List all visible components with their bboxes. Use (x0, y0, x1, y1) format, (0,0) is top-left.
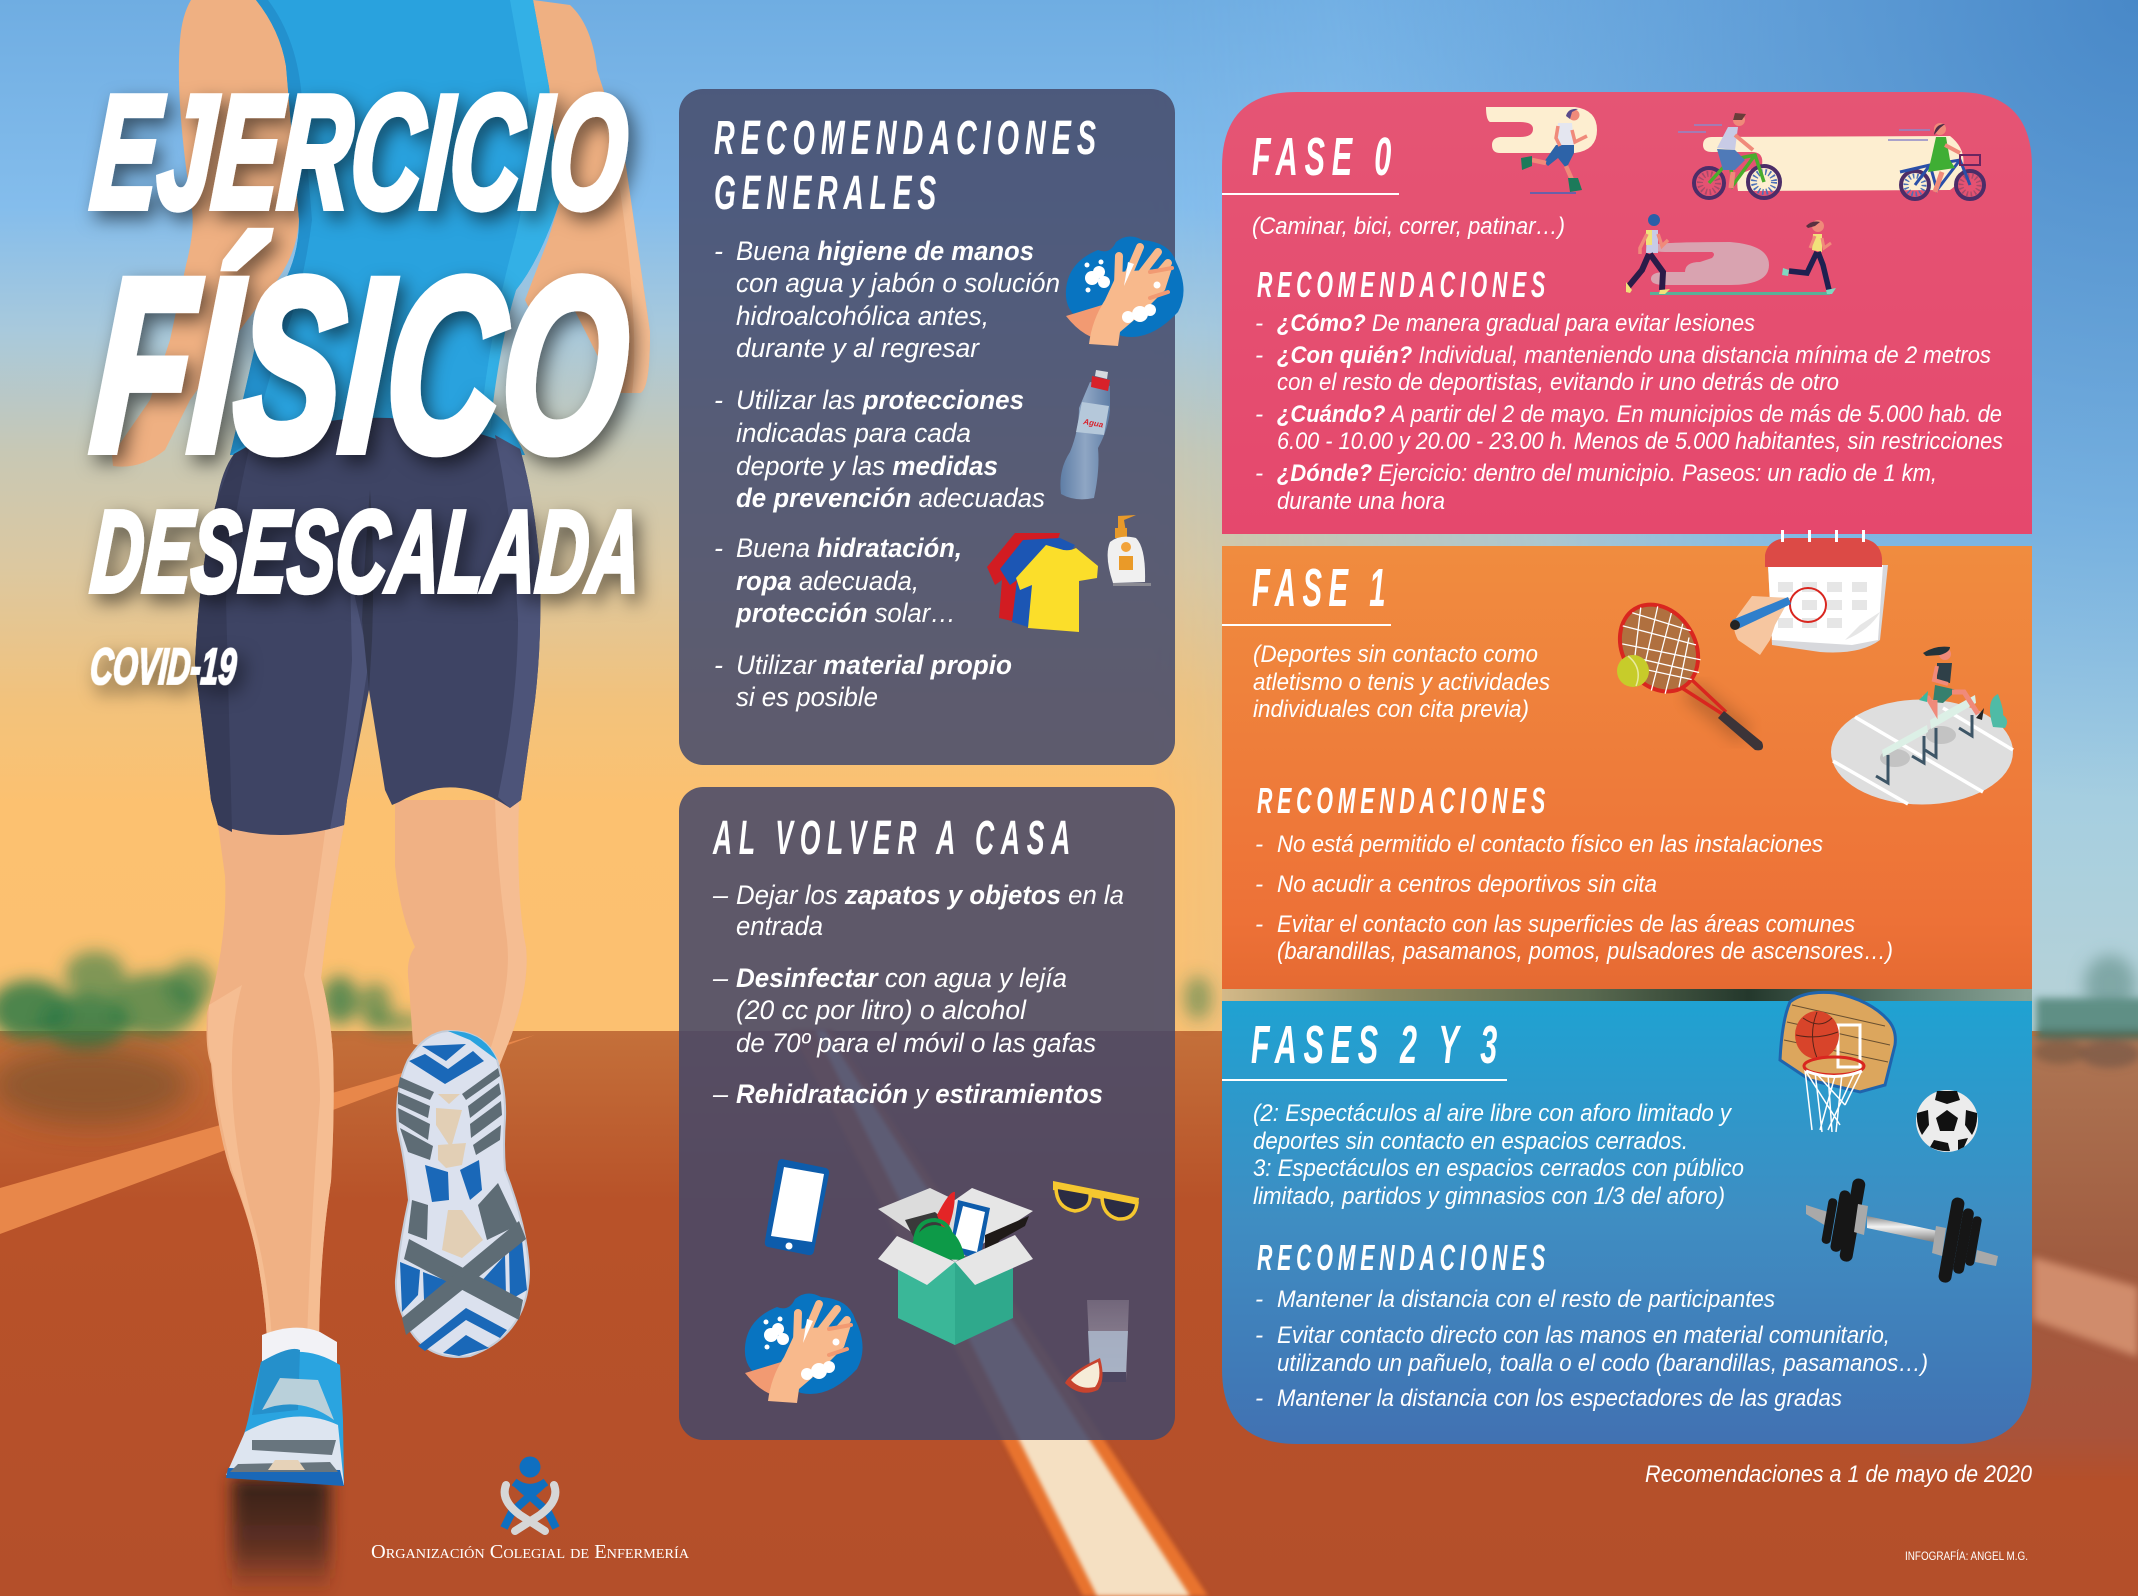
list: returning home: de 70º para el móvil o las gafas (736, 1028, 1096, 1058)
heading: recomendaciones generales: RECOMENDACIONES (714, 112, 1102, 165)
panel: fases 2 y 3 (1222, 992, 2032, 1444)
tank top (230, 0, 560, 455)
list: general recommendations: si es posible (736, 682, 878, 712)
list: phase 0: ¿Cómo? De manera gradual para evitar lesiones (1277, 310, 1755, 337)
subtitle: activities: (Caminar, bici, correr, patinar…) (1252, 213, 1565, 240)
description: phase 1: (Deportes sin contacto como (1253, 641, 1538, 668)
list: general recommendations: de prevención adecuadas (736, 483, 1045, 513)
list: general recommendations: Buena higiene de manos (736, 236, 1034, 266)
list: general recommendations: Utilizar las protecciones (736, 385, 1024, 415)
icon: basketball hoop (1780, 992, 1895, 1132)
panel: fase 0 (1222, 92, 2032, 534)
list: general recommendations: - (714, 385, 723, 415)
list: phase 1: - (1255, 911, 1263, 938)
list: returning home: entrada (736, 911, 823, 941)
running shoe (226, 1328, 344, 1486)
heading: al volver a casa: AL VOLVER A CASA (712, 812, 1077, 865)
logo: organización colegial de enfermería (371, 1456, 690, 1563)
list: general recommendations: - (714, 533, 723, 563)
heading: recomendaciones generales: GENERALES (714, 167, 942, 220)
shoe shadow (232, 1478, 330, 1596)
heading: recomendaciones: RECOMENDACIONES (1257, 264, 1550, 305)
panel: fase 1 (1222, 530, 2032, 989)
list: returning home (712, 880, 1124, 1109)
list: phase 0: durante una hora (1277, 488, 1445, 515)
title: EJERCICIO (87, 63, 633, 242)
icon: water bottle (1060, 370, 1110, 499)
list: phases 2 and 3 (1255, 1286, 1928, 1412)
panel: recomendaciones generales (679, 89, 1184, 765)
list: returning home: Desinfectar con agua y lejía (736, 963, 1067, 993)
list: phase 0: - (1255, 401, 1263, 428)
logo: organización colegial de enfermería: Organización Colegial de Enfermería (371, 1541, 690, 1563)
description: phases 2 and 3: (2: Espectáculos al aire libre con aforo limitado y (1253, 1100, 1733, 1127)
list: phase 0 (1255, 310, 2003, 515)
list: returning home: – (712, 880, 729, 910)
list: phases 2 and 3: - (1255, 1322, 1263, 1349)
icon: water bottle: Agua (1082, 417, 1104, 430)
icon: open box with belongings (878, 1188, 1033, 1345)
heading: recomendaciones: RECOMENDACIONES (1257, 1237, 1550, 1278)
description: phases 2 and 3: limitado, partidos y gimnasios con 1/3 del aforo) (1253, 1183, 1725, 1210)
list: returning home: Rehidratación y estiramientos (736, 1079, 1103, 1109)
shorts (195, 418, 540, 835)
description: phases 2 and 3 (1253, 1100, 1744, 1210)
icon: sun lotion bottle (1108, 515, 1151, 586)
list: phases 2 and 3: Mantener la distancia con el resto de participantes (1277, 1286, 1775, 1313)
list: phases 2 and 3: - (1255, 1385, 1263, 1412)
list: phase 1: No acudir a centros deportivos sin cita (1277, 871, 1657, 898)
list: general recommendations (714, 236, 1060, 712)
list: general recommendations: durante y al regresar (736, 333, 980, 363)
list: general recommendations: hidroalcohólica antes, (736, 301, 989, 331)
list: general recommendations: ropa adecuada, (736, 566, 919, 596)
title (85, 63, 645, 695)
icon: glass of water and apple (1065, 1300, 1129, 1393)
icon: dumbbell (1806, 1178, 1998, 1284)
icon: hurdler on track (1831, 647, 2013, 804)
icon: hand washing (1066, 236, 1184, 346)
heading: fases 2 y 3: FASES 2 Y 3 (1251, 1015, 1504, 1075)
list: phase 0: con el resto de deportistas, evitando ir uno detrás de otro (1277, 369, 1839, 396)
list: phase 1: (barandillas, pasamanos, pomos, pulsadores de ascensores…) (1277, 938, 1893, 965)
arms (112, 0, 299, 467)
title: DESESCALADA (87, 487, 645, 616)
list: general recommendations: - (714, 236, 723, 266)
list: phase 1 (1255, 831, 1893, 965)
list: phase 1: Evitar el contacto con las superficies de las áreas comunes (1277, 911, 1855, 938)
footnote: date: Recomendaciones a 1 de mayo de 2020 (1645, 1461, 2032, 1488)
list: phase 0: - (1255, 310, 1263, 337)
heading: recomendaciones generales (714, 112, 1102, 220)
runner illustration (112, 0, 650, 1596)
standing left leg (206, 825, 344, 1340)
heading: fase 0: FASE 0 (1252, 127, 1398, 187)
description: phases 2 and 3: 3: Espectáculos en espacios cerrados con público (1253, 1155, 1744, 1182)
list: phase 0: 6.00 - 10.00 y 20.00 - 23.00 h. Menos de 5.000 habitantes, sin restricciones (1277, 428, 2003, 455)
list: phase 1: No está permitido el contacto físico en las instalaciones (1277, 831, 1823, 858)
description: phase 1: atletismo o tenis y actividades (1253, 669, 1550, 696)
list: phases 2 and 3: - (1255, 1286, 1263, 1313)
icon: calendar with pencil (1730, 530, 1888, 655)
title: COVID-19 (88, 638, 239, 695)
raised right leg (395, 800, 527, 1069)
shoe sole (396, 1031, 529, 1357)
list: phases 2 and 3: Mantener la distancia con los espectadores de las gradas (1277, 1385, 1842, 1412)
list: phase 0: - (1255, 460, 1263, 487)
list: returning home: Dejar los zapatos y objetos en la (736, 880, 1124, 910)
list: phases 2 and 3: utilizando un pañuelo, toalla o el codo (barandillas, pasamanos…) (1277, 1350, 1928, 1377)
list: phase 1: - (1255, 871, 1263, 898)
list: returning home: – (712, 963, 729, 993)
heading: fase 1: FASE 1 (1252, 558, 1392, 618)
list: phase 0: ¿Cuándo? A partir del 2 de mayo. En municipios de más de 5.000 hab. de (1277, 401, 2002, 428)
list: phase 0: - (1255, 342, 1263, 369)
list: general recommendations: Buena hidratación, (736, 533, 962, 563)
list: returning home: (20 cc por litro) o alcohol (736, 995, 1027, 1025)
icon: tennis racket and ball (1604, 590, 1763, 750)
list: general recommendations: con agua y jabón o solución (736, 268, 1060, 298)
title: FÍSICO (85, 228, 637, 503)
list: general recommendations: protección solar… (735, 598, 956, 628)
list: returning home: – (712, 1079, 729, 1109)
icon: t-shirts (987, 533, 1098, 632)
list: general recommendations: deporte y las medidas (736, 451, 998, 481)
icon: runners (1626, 214, 1836, 295)
list: phase 1: - (1255, 831, 1263, 858)
list: phase 0: ¿Dónde? Ejercicio: dentro del municipio. Paseos: un radio de 1 km, (1277, 460, 1937, 487)
icon: inline skater (1486, 107, 1597, 194)
list: phase 0: ¿Con quién? Individual, manteniendo una distancia mínima de 2 metros (1277, 342, 1991, 369)
description: phase 1 (1253, 641, 1550, 723)
credit: infographic author: INFOGRAFÍA: ANGEL M.G. (1905, 1550, 2028, 1563)
description: phases 2 and 3: deportes sin contacto en espacios cerrados. (1253, 1128, 1688, 1155)
icon: phone (765, 1159, 829, 1255)
list: general recommendations: indicadas para cada (736, 418, 971, 448)
list: general recommendations: - (714, 650, 723, 680)
icon: cyclists (1678, 113, 1984, 199)
icon: soccer ball (1916, 1090, 1978, 1152)
icon: sunglasses (1053, 1181, 1139, 1219)
panel: al volver a casa (679, 787, 1175, 1440)
list: general recommendations: Utilizar material propio (736, 650, 1012, 680)
heading: recomendaciones: RECOMENDACIONES (1257, 780, 1550, 821)
description: phase 1: individuales con cita previa) (1253, 696, 1529, 723)
list: phases 2 and 3: Evitar contacto directo con las manos en material comunitario, (1277, 1322, 1890, 1349)
